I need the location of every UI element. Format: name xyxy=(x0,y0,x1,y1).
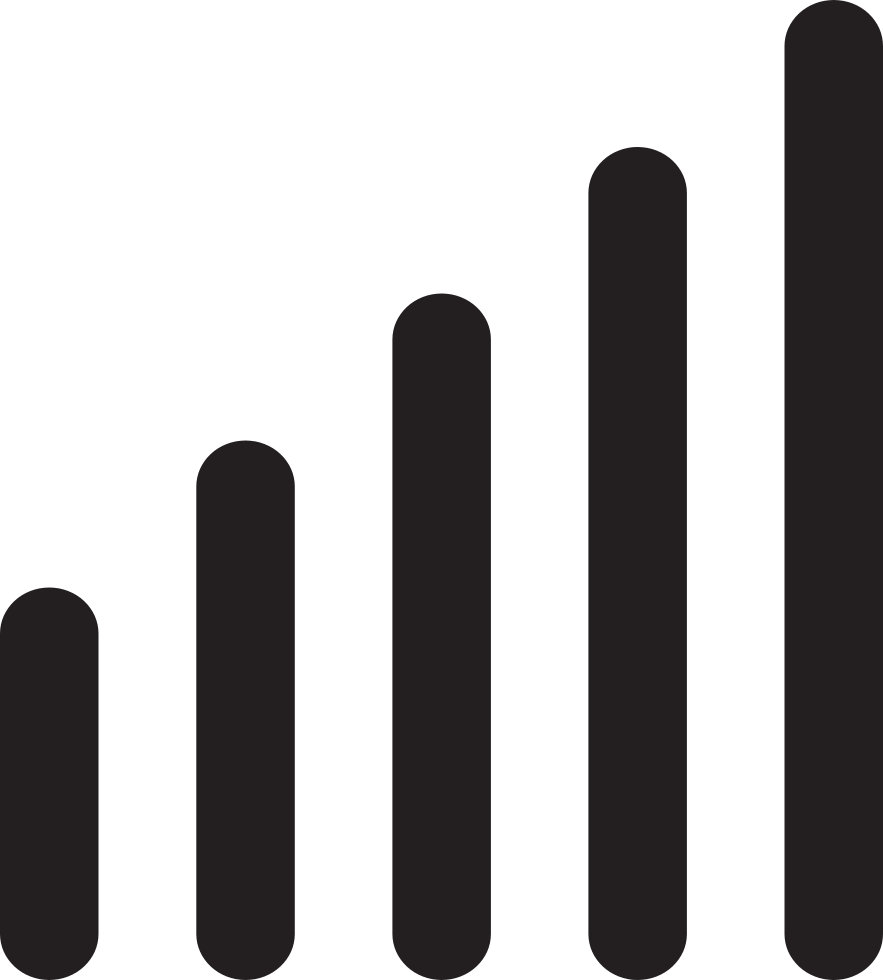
bar 2 xyxy=(196,440,295,980)
bar 1 xyxy=(0,588,98,980)
bar 5 xyxy=(784,0,883,980)
bar 3 xyxy=(392,294,491,980)
bar 4 xyxy=(588,147,687,980)
